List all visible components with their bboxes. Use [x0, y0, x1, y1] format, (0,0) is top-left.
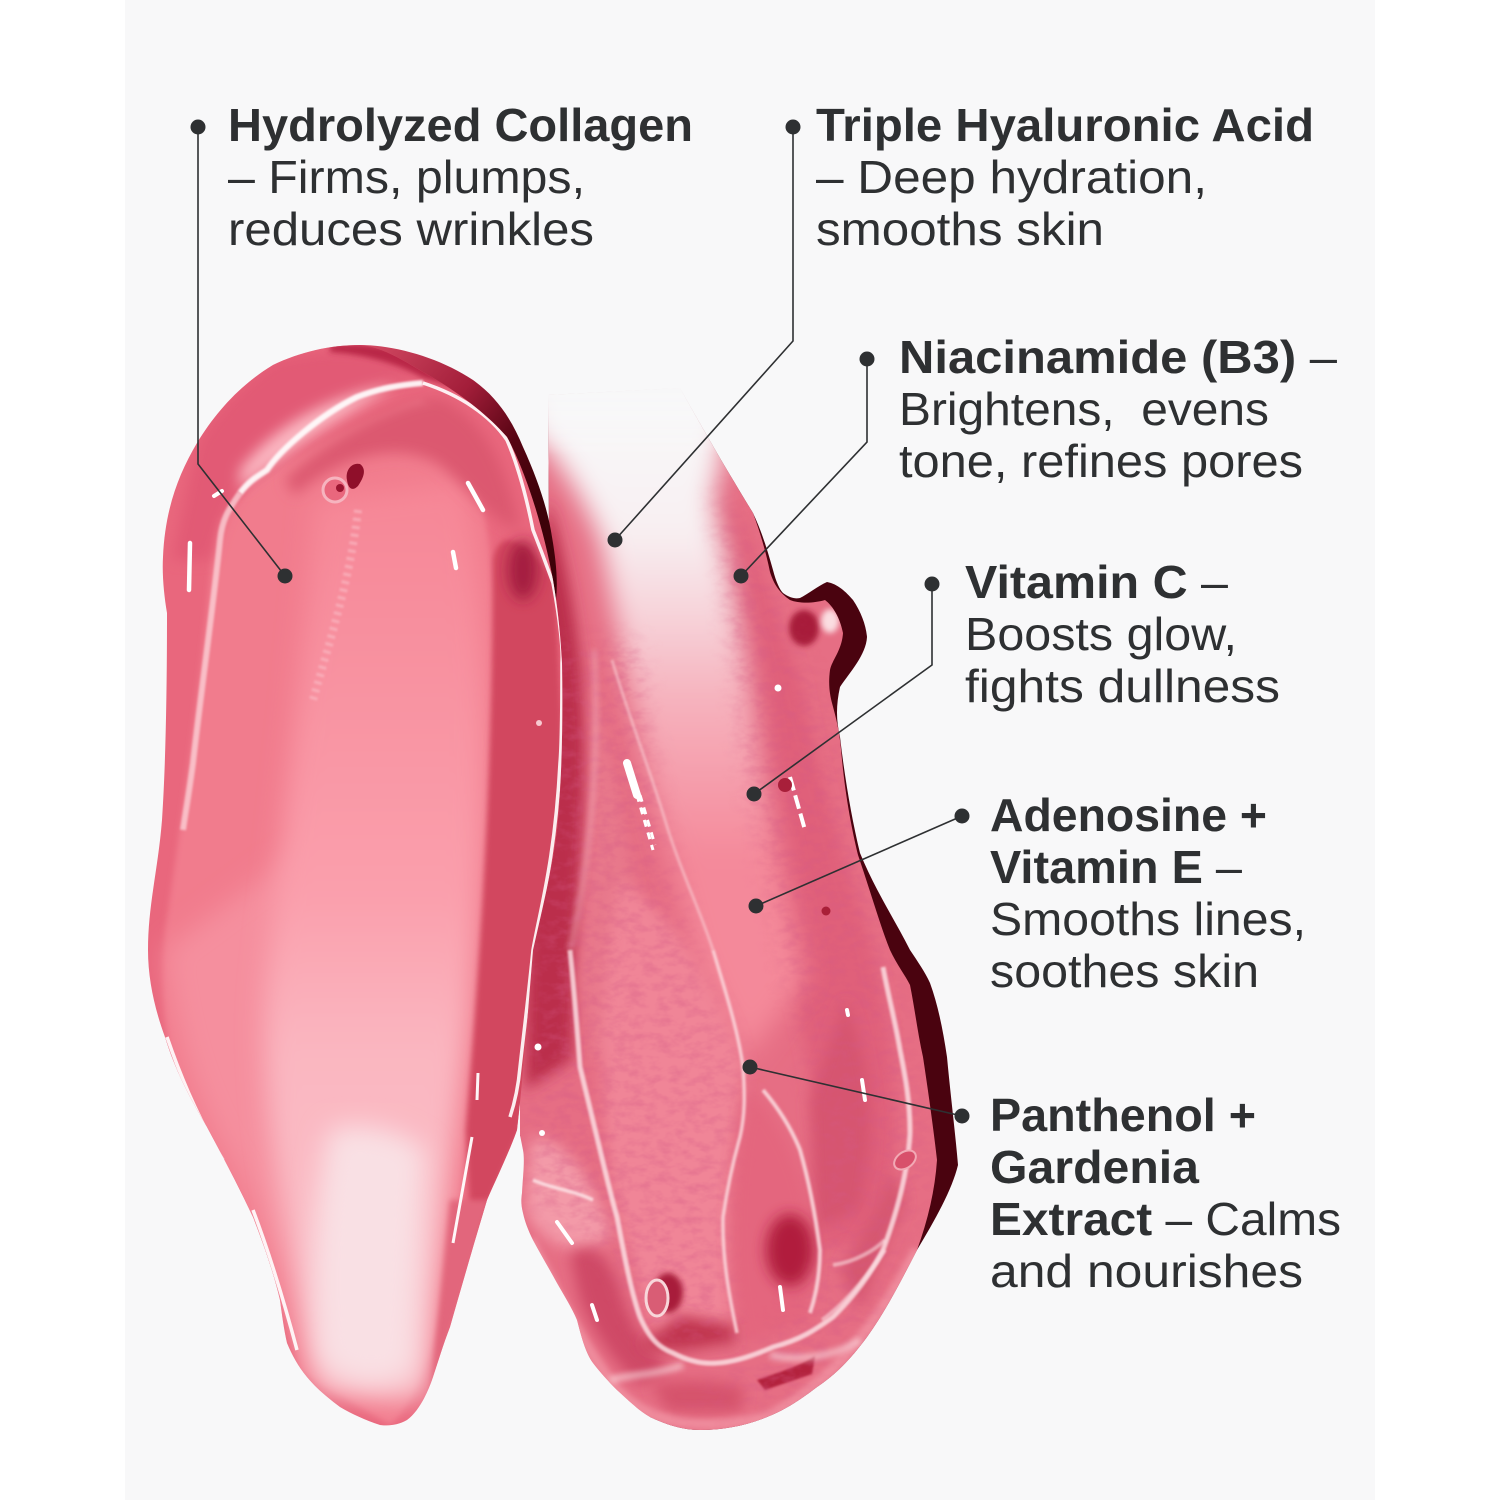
veins	[570, 950, 910, 1363]
callout: panthenol + gardenia extract: Gardenia	[990, 1141, 1199, 1193]
central light stripe	[530, 370, 805, 1060]
callout: adenosine + vitamin e	[748, 789, 1306, 997]
serum swatch: left smear	[140, 340, 570, 1430]
callout: hydrolyzed collagen: – Firms, plumps,	[228, 151, 585, 203]
mottled texture	[531, 526, 814, 1390]
top band	[172, 350, 423, 560]
callout: hydrolyzed collagen	[190, 99, 693, 584]
callout: adenosine + vitamin e: soothes skin	[990, 945, 1259, 997]
right dark band	[466, 540, 565, 1240]
glints	[627, 763, 637, 795]
lower lobe	[525, 1138, 612, 1249]
callout: niacinamide	[734, 331, 1337, 584]
callout: niacinamide: tone, refines pores	[899, 435, 1303, 487]
top shadow overlay	[328, 345, 453, 391]
callout: niacinamide: Niacinamide (B3) –	[899, 331, 1337, 383]
callout: panthenol + gardenia extract: and nourishes	[990, 1245, 1303, 1297]
dark band beside left smear	[525, 500, 586, 1090]
callout: panthenol + gardenia extract: Extract – Calms	[990, 1193, 1341, 1245]
callout: triple hyaluronic acid: – Deep hydration,	[816, 151, 1207, 203]
light centre	[265, 480, 485, 1400]
left main body	[163, 400, 495, 1425]
highlights	[240, 383, 423, 493]
callout: hydrolyzed collagen: reduces wrinkles	[228, 203, 594, 255]
callout: adenosine + vitamin e: Adenosine +	[990, 789, 1267, 841]
callout: vitamin c: Vitamin C –	[965, 556, 1228, 608]
serum swatch: right smear	[520, 393, 958, 1430]
callout: triple hyaluronic acid	[608, 99, 1314, 548]
lower central area	[602, 880, 745, 1350]
rim glow	[530, 1240, 917, 1424]
callout: vitamin c: fights dullness	[965, 660, 1280, 712]
mottled right band	[724, 504, 892, 1245]
callout: adenosine + vitamin e: Smooths lines,	[990, 893, 1306, 945]
callout: vitamin c: Boosts glow,	[965, 608, 1237, 660]
callout: vitamin c	[746, 556, 1280, 802]
crevice	[347, 464, 364, 489]
callout: triple hyaluronic acid: smooths skin	[816, 203, 1104, 255]
callout: hydrolyzed collagen: Hydrolyzed Collagen	[228, 99, 693, 151]
callout: adenosine + vitamin e: Vitamin E –	[990, 841, 1242, 893]
callout: niacinamide: Brightens, evens	[899, 383, 1269, 435]
callout: triple hyaluronic acid: Triple Hyaluronic Acid	[816, 99, 1314, 151]
infographic	[148, 108, 1340, 1430]
callout: panthenol + gardenia extract	[742, 1060, 1341, 1297]
bubbles	[653, 1273, 683, 1313]
dark pools	[766, 1214, 814, 1286]
callout: panthenol + gardenia extract: Panthenol +	[990, 1089, 1256, 1141]
